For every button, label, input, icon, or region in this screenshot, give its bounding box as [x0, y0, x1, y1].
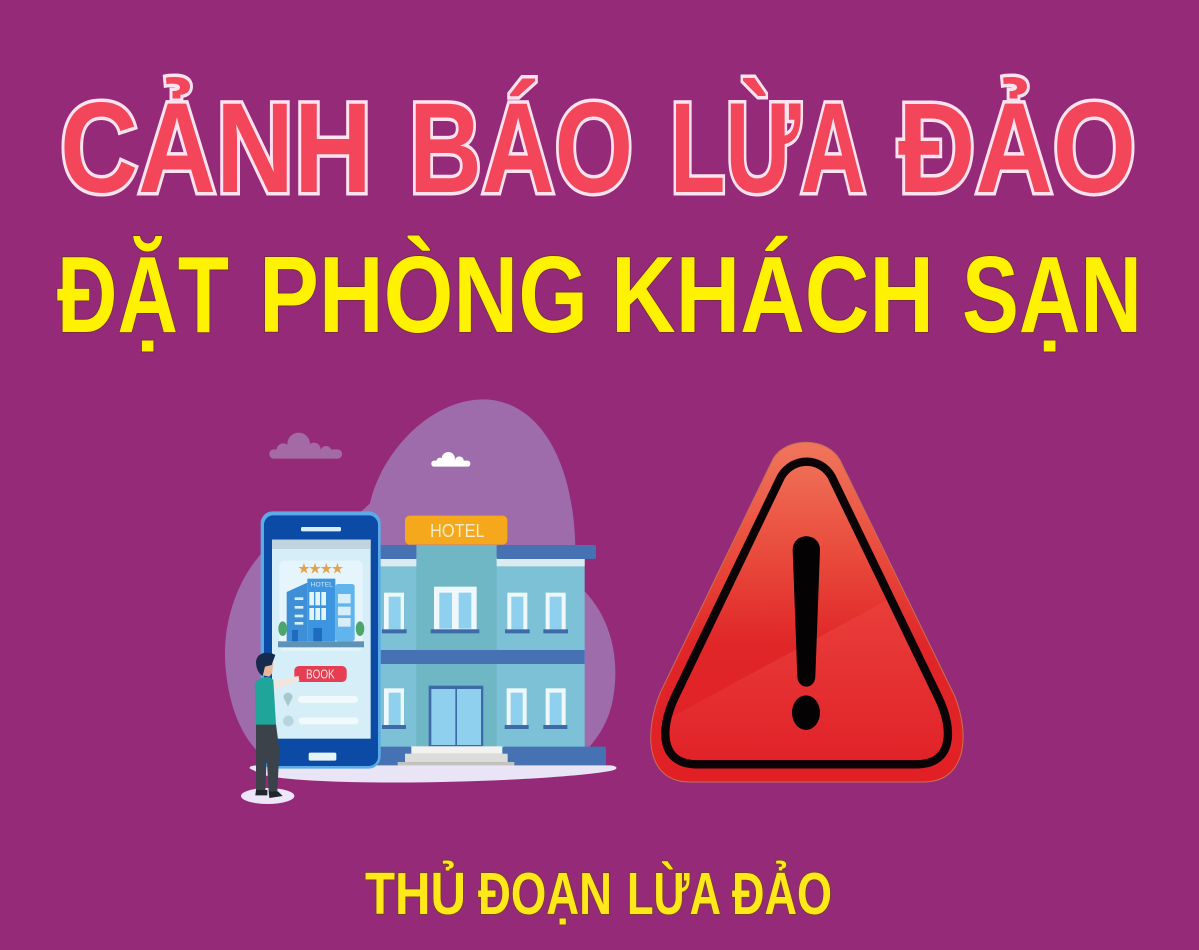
legs	[256, 724, 279, 792]
phone home button	[309, 753, 336, 761]
exclamation mark	[792, 536, 820, 730]
footer label: scam tactics: LỪA	[627, 861, 721, 927]
cloud: left	[269, 433, 342, 459]
phone body	[261, 511, 381, 769]
illustration: hotel booking scene	[225, 399, 616, 804]
hotel sign: HOTEL	[430, 520, 485, 541]
lower windows	[382, 688, 567, 729]
warning triangle icon	[651, 442, 973, 782]
book button	[294, 666, 347, 682]
ground ellipse	[250, 765, 616, 782]
upper windows	[382, 587, 568, 633]
hotel floor band	[381, 650, 585, 664]
background blob	[225, 399, 615, 767]
subtitle: hotel booking: KHÁCH	[611, 234, 934, 356]
footer label: scam tactics: THỦ	[365, 860, 466, 927]
subtitle: hotel booking: PHÒNG	[259, 234, 588, 356]
title: warning headline: ĐẢO	[898, 76, 1136, 220]
hotel steps	[398, 746, 514, 770]
person	[241, 653, 299, 804]
form rows	[283, 693, 359, 726]
subtitle: hotel booking	[57, 234, 1142, 356]
book button: BOOK	[306, 667, 335, 682]
triangle outer	[651, 442, 963, 782]
triangle black border	[665, 462, 948, 764]
gloss highlight	[686, 600, 938, 712]
title: warning headline	[60, 76, 1136, 220]
shoes	[255, 790, 267, 795]
footer label: scam tactics	[365, 860, 832, 927]
hotel base	[377, 747, 412, 769]
cloud: white	[431, 452, 470, 467]
mini hotel graphic	[278, 579, 364, 647]
hotel central tower	[416, 545, 497, 758]
footer label: scam tactics: ĐẢO	[732, 860, 832, 927]
hotel door	[429, 686, 483, 746]
title: warning headline: LỪA	[670, 77, 866, 220]
title: warning headline: CẢNH	[60, 76, 372, 220]
subtitle: hotel booking: SẠN	[962, 234, 1142, 356]
torso	[255, 677, 276, 725]
phone screen	[272, 540, 371, 739]
mini hotel graphic: HOTEL	[311, 582, 333, 589]
subtitle: hotel booking: ĐẶT	[57, 234, 229, 356]
rating stars: ★★★★	[297, 560, 344, 577]
hotel roof	[380, 545, 416, 559]
phone	[261, 511, 381, 769]
hotel sign	[405, 516, 507, 545]
head and hair	[261, 663, 273, 677]
title: warning headline: BÁO	[409, 77, 633, 220]
hotel wall	[380, 557, 585, 757]
arm	[270, 676, 299, 690]
person shadow	[241, 788, 294, 804]
footer label: scam tactics: ĐOẠN	[478, 861, 612, 927]
hotel building	[377, 516, 606, 770]
